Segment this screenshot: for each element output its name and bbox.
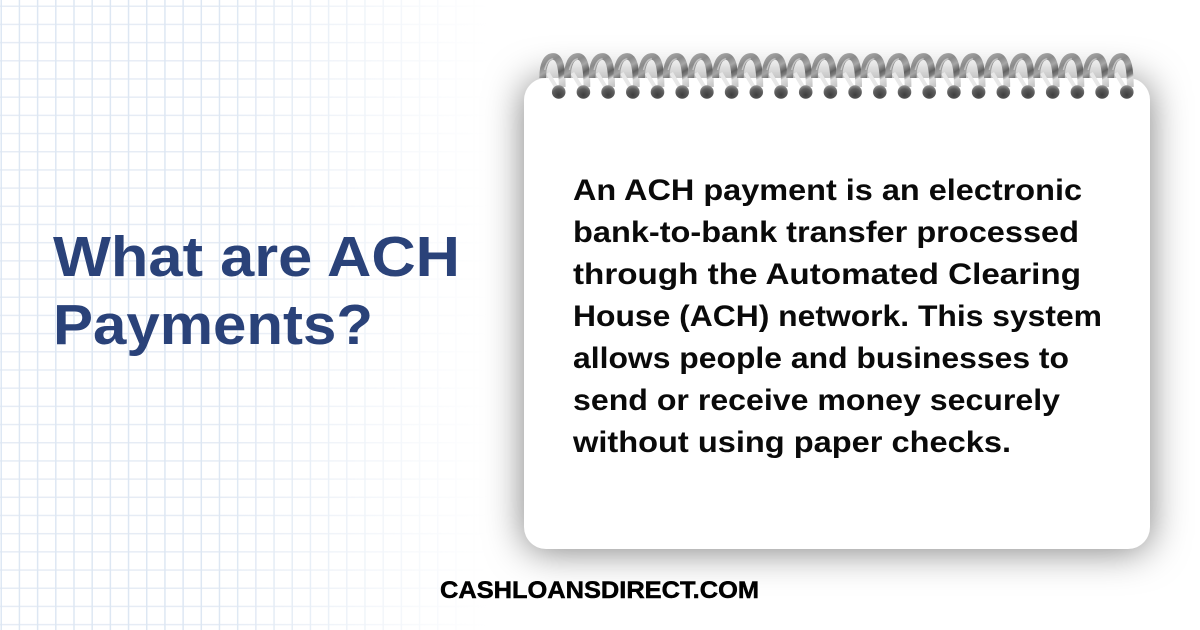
- title: [53, 225, 460, 357]
- footer website: CASHLOANSDIRECT.COM: [440, 577, 759, 604]
- body text: [572, 174, 1102, 459]
- body text: without using paper checks.: [572, 426, 1011, 459]
- body text: allows people and businesses to: [573, 342, 1069, 375]
- body text: send or receive money securely: [573, 384, 1060, 417]
- body text: House (ACH) network. This system: [573, 300, 1102, 333]
- body text: bank-to-bank transfer processed: [573, 216, 1079, 249]
- notebook spiral binding: [543, 56, 1134, 99]
- body text: through the Automated Clearing: [573, 258, 1081, 291]
- title: Payments?: [53, 293, 373, 357]
- title: What are ACH: [53, 225, 460, 289]
- body text: An ACH payment is an electronic: [573, 174, 1082, 207]
- panel: notebook card: [524, 78, 1150, 549]
